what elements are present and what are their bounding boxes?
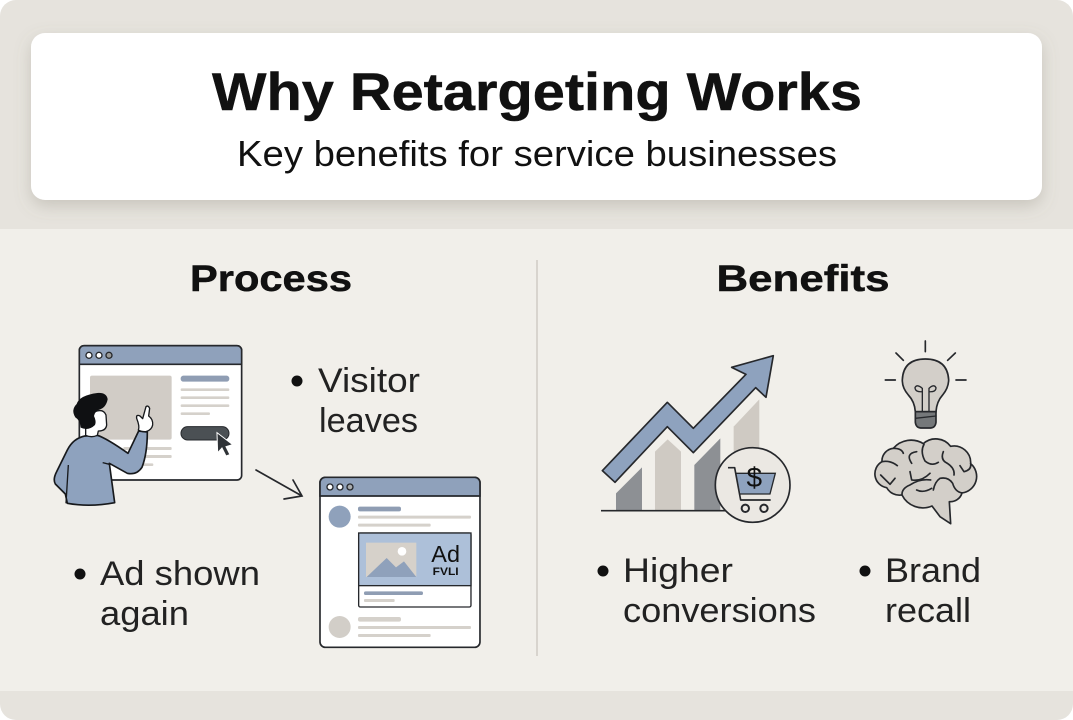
- bullet: ad shown again: [74, 555, 260, 633]
- bullet: brand recall: Brand: [885, 552, 981, 590]
- illustration: rising chart with cart: [601, 356, 790, 522]
- illustration: website with visitor: [54, 346, 242, 505]
- arrow: between browser windows: [256, 470, 302, 499]
- illustration: ad in feed window: FVLI: [433, 566, 459, 578]
- bullet: higher conversions: conversions: [623, 592, 816, 630]
- header card: [31, 33, 1042, 200]
- illustration: rising chart with cart: $: [747, 462, 763, 493]
- illustration: light bulb: [885, 341, 966, 428]
- center divider: [536, 260, 538, 656]
- bullet: brand recall: [860, 552, 981, 630]
- bullet: visitor leaves: Visitor: [318, 362, 420, 400]
- bullet: visitor leaves: [292, 362, 420, 440]
- bullet: visitor leaves: leaves: [319, 402, 418, 440]
- heading: Benefits: Benefits: [716, 258, 890, 299]
- heading: Process: Process: [190, 258, 352, 299]
- bullet: brand recall: recall: [885, 592, 971, 630]
- subtitle: Key benefits for service businesses: [237, 133, 837, 174]
- illustration: ad in feed window: Ad: [431, 541, 460, 567]
- bullet: higher conversions: Higher: [623, 552, 733, 590]
- content panel: [0, 229, 1073, 691]
- bullet: higher conversions: [598, 552, 816, 630]
- title: Why Retargeting Works: [212, 63, 862, 122]
- illustration: brain: [875, 439, 977, 524]
- bullet: ad shown again: Ad shown: [100, 555, 260, 593]
- bullet: ad shown again: again: [100, 595, 189, 633]
- illustration: ad in feed window: [320, 477, 480, 647]
